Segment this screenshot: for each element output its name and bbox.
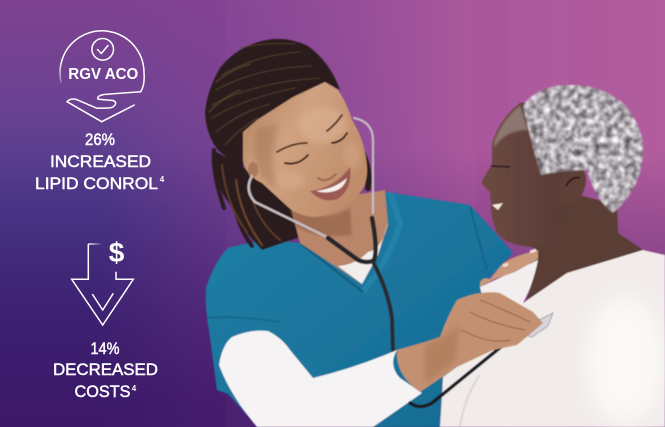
- nurse forearm and hand: [397, 292, 543, 392]
- icon: down arrow with dollar sign: [72, 237, 133, 325]
- stethoscope upper tubes: [249, 118, 393, 350]
- nurse fingers on shoulder: [480, 250, 538, 287]
- nurse dreadlocks: [213, 140, 369, 250]
- stat: 26% increased lipid control: [35, 130, 165, 193]
- patient neck: [497, 190, 643, 310]
- stat: 14% decreased costs: [53, 339, 158, 401]
- nurse neck and chest: [290, 190, 388, 284]
- nurse face: [243, 82, 367, 217]
- nurse undershirt: [338, 222, 388, 284]
- patient white blouse: [440, 250, 665, 427]
- stat: 14% decreased costs: DECREASED: [53, 360, 158, 379]
- icon: down arrow with dollar sign: $: [109, 237, 125, 268]
- patient grey hair: [523, 85, 643, 213]
- stat: 26% increased lipid control: 26%: [85, 130, 115, 149]
- patient face: [482, 100, 570, 247]
- nurse hair: [205, 39, 340, 167]
- stat: 26% increased lipid control: LIPID CONROL: [35, 174, 158, 193]
- stat: 14% decreased costs: 4: [132, 384, 137, 393]
- patient ear: [560, 167, 586, 206]
- icon: RGV ACO hand and check: [60, 31, 144, 122]
- stethoscope lower tube and chest piece: [410, 313, 553, 406]
- nurse facial features: [248, 115, 350, 200]
- stat: 14% decreased costs: 14%: [90, 339, 120, 358]
- stat: 14% decreased costs: COSTS: [74, 382, 130, 401]
- stat: 26% increased lipid control: 4: [160, 175, 165, 184]
- photo: nurse and patient: [205, 39, 665, 427]
- nurse white sleeve: [219, 331, 422, 427]
- stat: 26% increased lipid control: INCREASED: [50, 152, 151, 171]
- nurse scrub top: [206, 192, 513, 427]
- icon label: RGV ACO: RGV ACO: [68, 66, 138, 83]
